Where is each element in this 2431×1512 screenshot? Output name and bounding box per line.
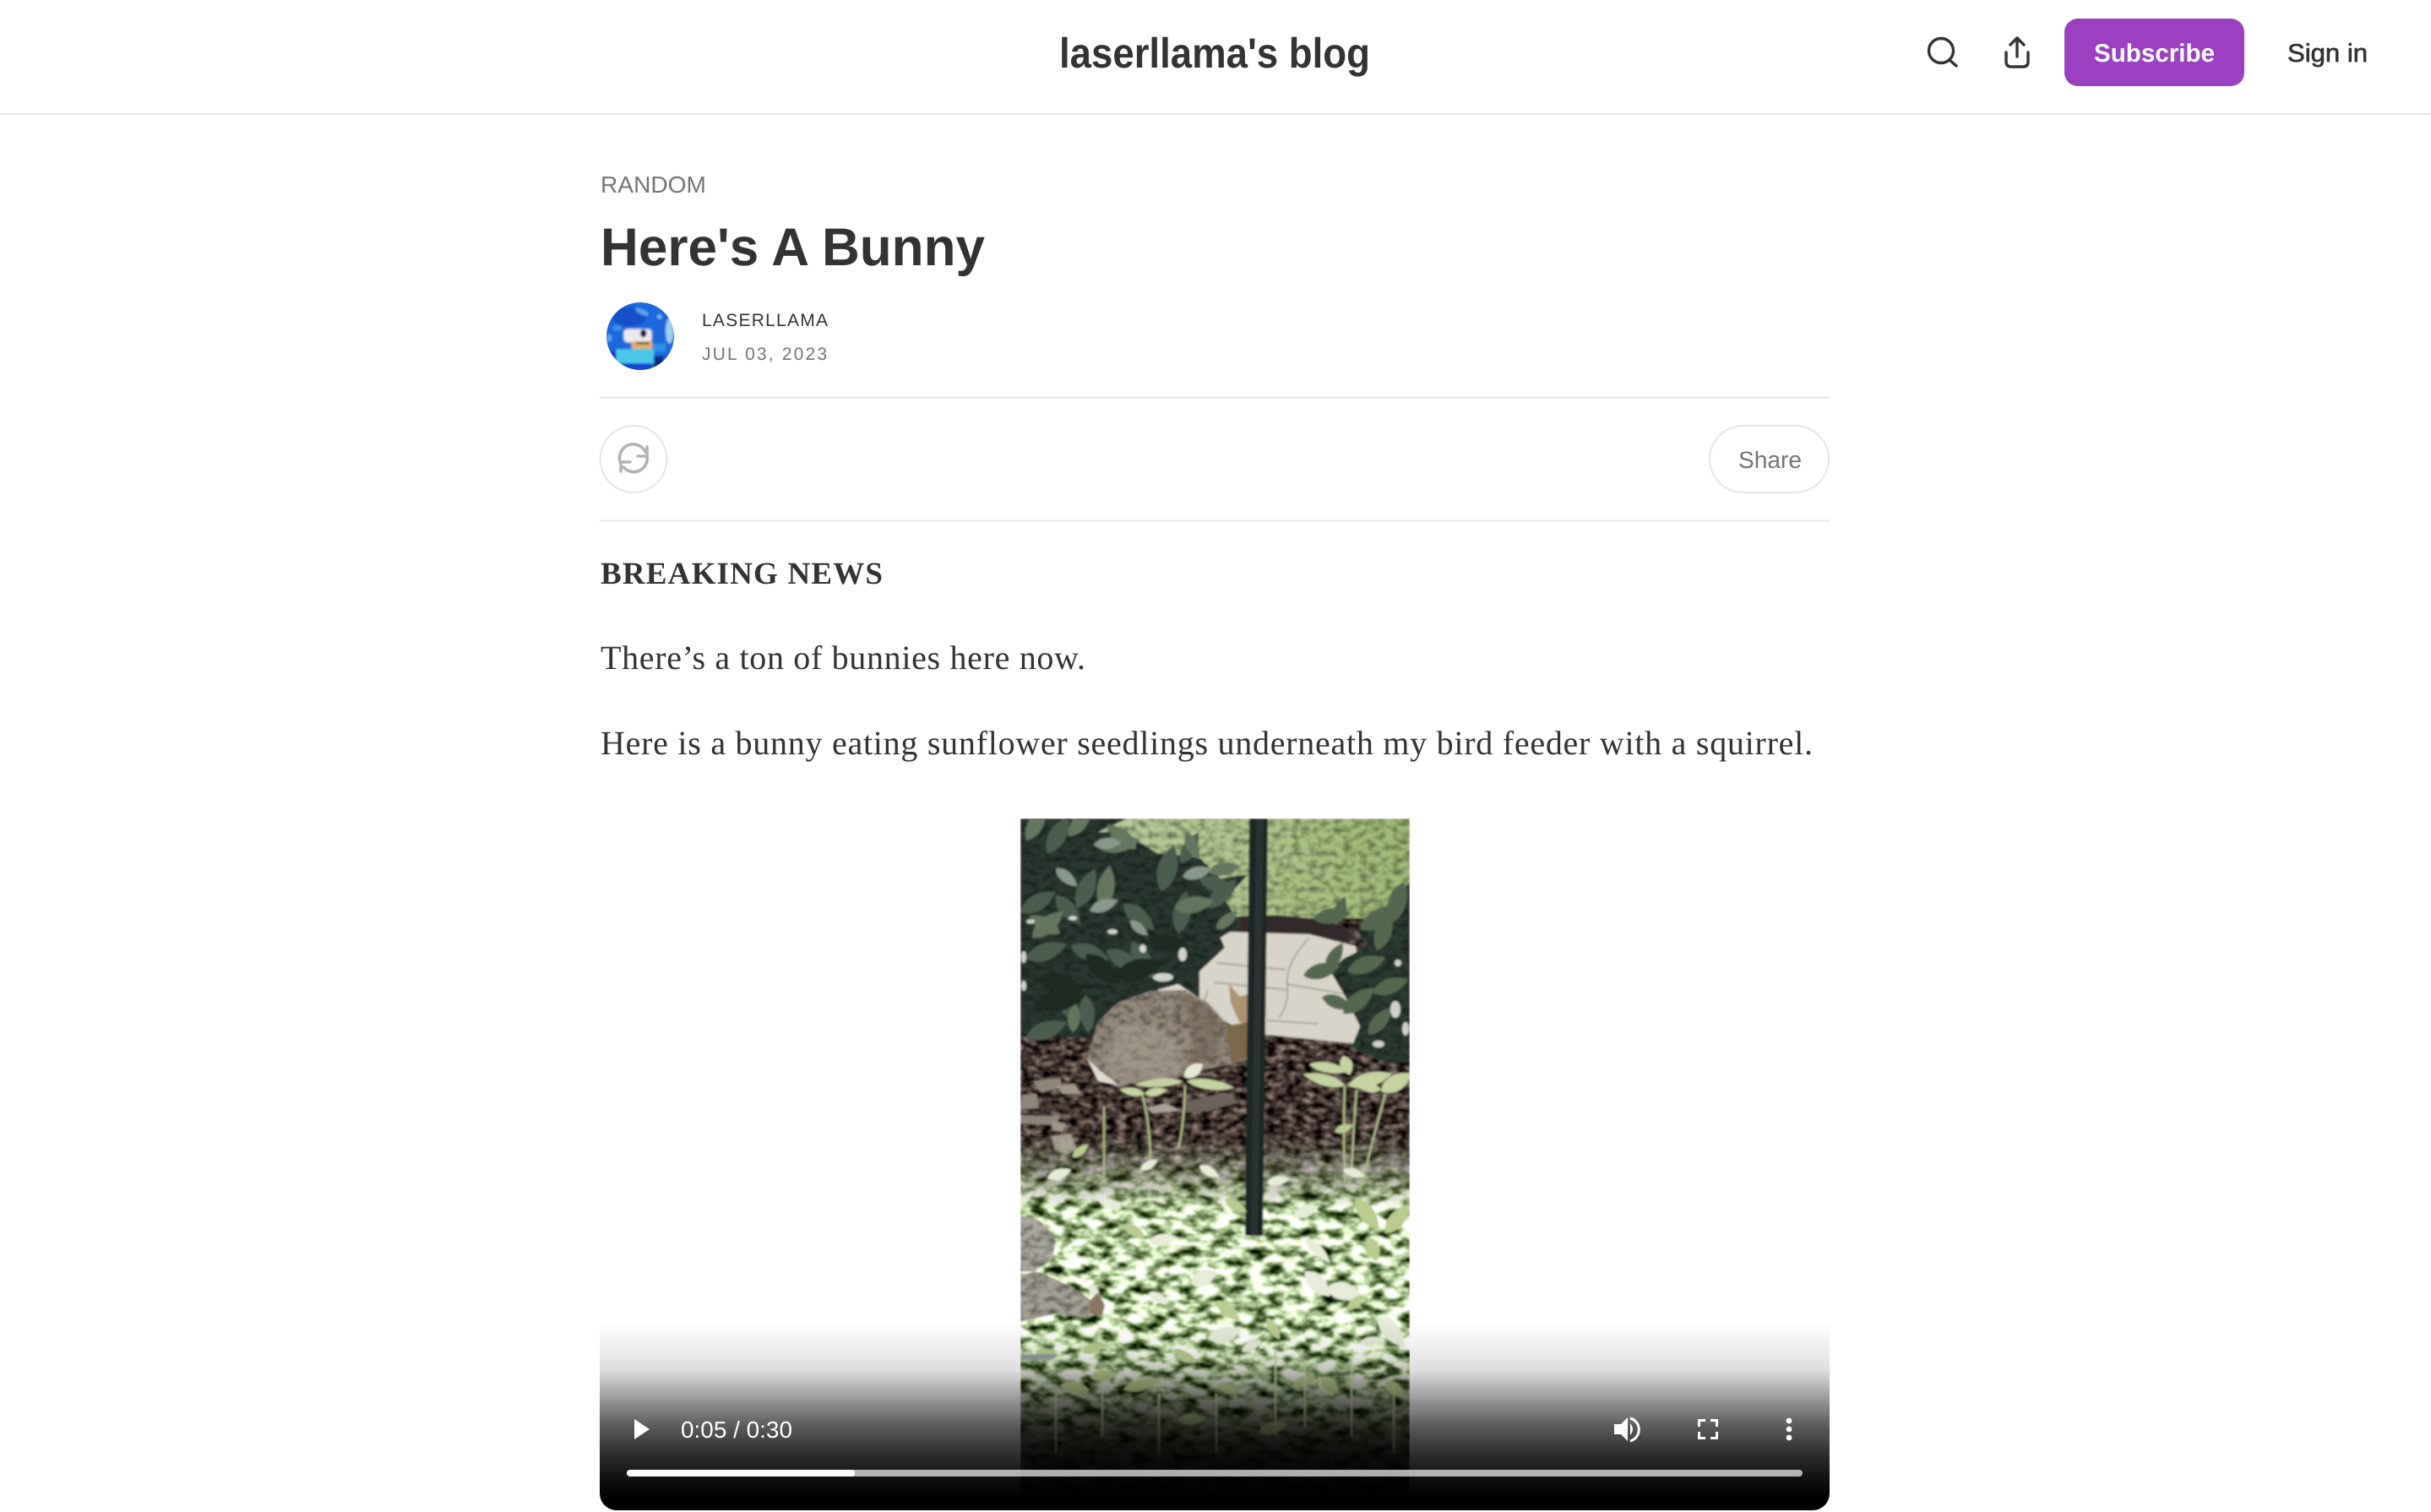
icon: more options: [1787, 1418, 1792, 1440]
video frame: bunny in garden: [1016, 804, 1416, 1512]
small seedling leaves: [1034, 1121, 1416, 1453]
blog name: laserllama's blog: [1059, 30, 1370, 77]
icon: restack arrows: [619, 444, 647, 472]
rabbit ear: [1229, 984, 1248, 1024]
icon: play: [634, 1419, 650, 1439]
video player: [600, 804, 1830, 1512]
post title: Here's A Bunny: [601, 218, 985, 277]
soil shadow under seedlings: [1020, 1354, 1410, 1482]
grass: [1020, 819, 1410, 945]
rabbit: [1087, 984, 1248, 1085]
category label: RANDOM: [601, 171, 706, 198]
subscribe button: [2064, 19, 2244, 86]
squirrel: [1020, 1216, 1105, 1360]
mulch ground: [1020, 917, 1410, 1207]
left shrub: [1016, 804, 1248, 1046]
share button: [1710, 426, 1829, 492]
icon: volume: [1614, 1417, 1639, 1441]
author avatar: [606, 302, 674, 370]
elapsed time: 0:05 / 0:30: [681, 1417, 792, 1443]
right shrub: [1302, 878, 1414, 1063]
author name: LASERLLAMA: [702, 311, 828, 330]
icon: search: [1929, 39, 1956, 66]
restack button: [600, 426, 667, 492]
stones: [1020, 1078, 1239, 1155]
icon: fullscreen: [1700, 1421, 1716, 1438]
paver path: [1156, 930, 1362, 1045]
feeder pole: [1245, 819, 1268, 1236]
sign in link: Sign in: [2287, 40, 2368, 68]
subscribe button: Subscribe: [2094, 40, 2215, 68]
share button: Share: [1738, 447, 1802, 473]
progress bar: [627, 1470, 1803, 1477]
seedling texture: [1020, 1135, 1410, 1470]
section heading: BREAKING NEWS: [601, 557, 883, 591]
top navigation bar: [0, 19, 2431, 115]
paragraph one: There’s a ton of bunnies here now.: [601, 639, 1085, 677]
tall sunflower seedlings: [1104, 1054, 1416, 1191]
controls gradient overlay: [600, 1318, 1830, 1510]
icon: share: [2006, 38, 2028, 67]
post date: JUL 03, 2023: [702, 345, 827, 364]
paragraph two: Here is a bunny eating sunflower seedlings underneath my bird feeder with a squirrel.: [601, 724, 1813, 762]
